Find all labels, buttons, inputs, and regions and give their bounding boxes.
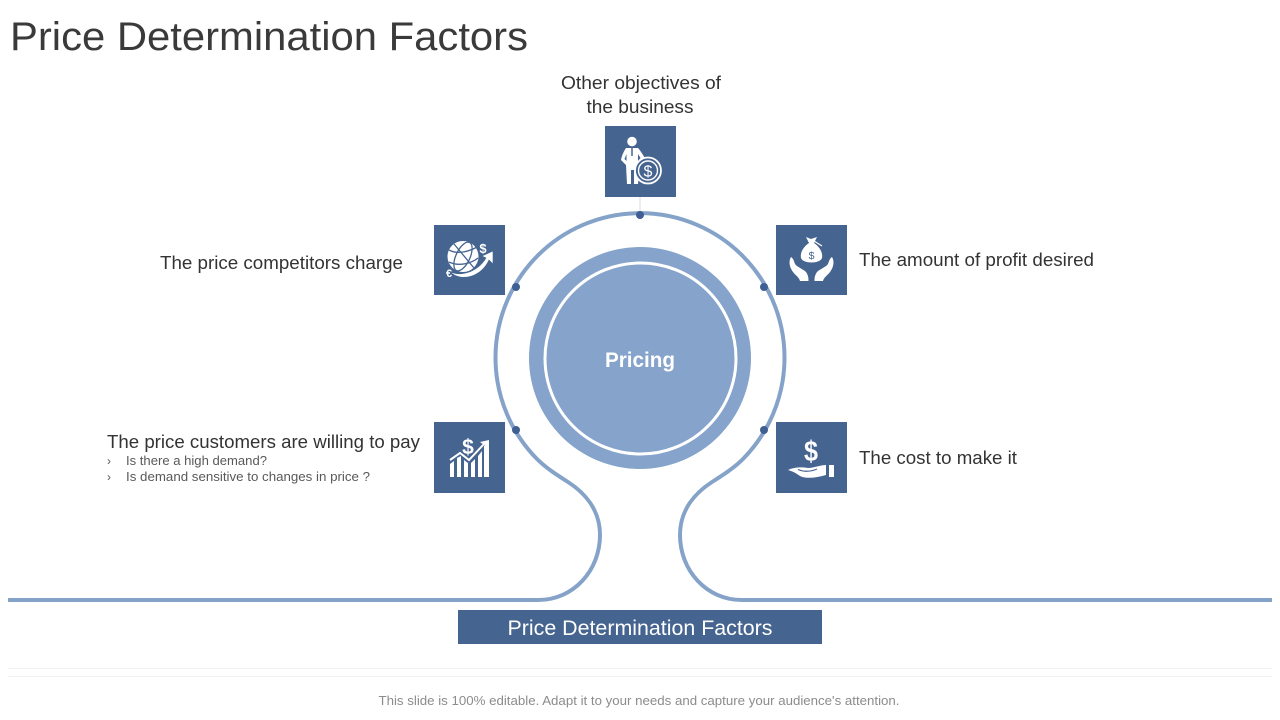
icon: hand with dollar: $	[804, 436, 818, 468]
icon: money bag in hands: $	[809, 250, 815, 262]
label: competitors: The price competitors charge	[160, 253, 403, 273]
label block: customers: ›	[107, 470, 111, 484]
label block: customers: Is there a high demand?	[126, 454, 267, 468]
subtitle bar	[458, 610, 822, 644]
icon: globe with currency arrow	[434, 225, 505, 295]
connector dots	[512, 197, 768, 434]
icon: globe with currency arrow: $	[479, 241, 487, 256]
icon: businessman with dollar coin: $	[644, 164, 653, 180]
outer ring and baseline curve	[8, 213, 1272, 600]
label block: customers: The price customers are willing to pay	[107, 432, 420, 452]
icon: globe with currency arrow: €	[446, 268, 452, 280]
label block: customers: Is demand sensitive to changes in price ?	[126, 470, 370, 484]
label: the business: the business	[586, 97, 694, 117]
icon: rising chart with dollar: $	[462, 436, 474, 459]
label block: customers: ›	[107, 454, 111, 468]
icon: businessman with dollar coin	[605, 126, 676, 197]
label: other objectives: Other objectives of	[561, 73, 722, 93]
icon: hand with dollar	[776, 422, 847, 493]
central circle: Pricing: Pricing	[605, 349, 675, 372]
footer note: This slide is 100% editable. Adapt it to your needs and capture your audience's attention.	[378, 694, 900, 708]
icon: rising chart with dollar	[434, 422, 505, 493]
icon: money bag in hands	[776, 225, 847, 295]
subtitle bar: Price Determination Factors	[508, 617, 772, 640]
central circle: Pricing	[529, 247, 751, 469]
label: cost: The cost to make it	[859, 448, 1017, 468]
title: Price Determination Factors	[10, 15, 528, 59]
label: profit: The amount of profit desired	[859, 250, 1094, 270]
label block: customers	[107, 432, 420, 484]
